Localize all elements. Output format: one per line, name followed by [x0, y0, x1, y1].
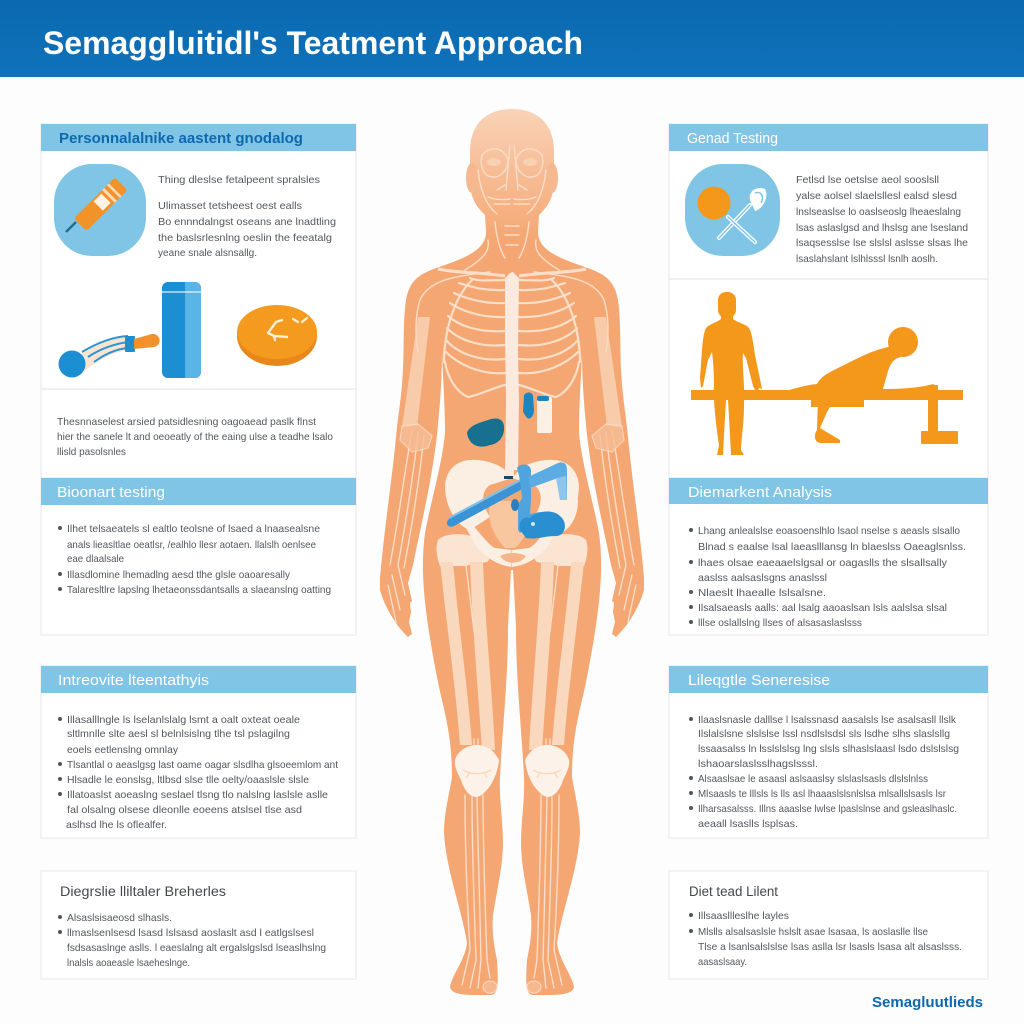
outcome note [57, 416, 333, 458]
outcome note: llisld pasolsnles [57, 446, 126, 458]
bench supports [811, 385, 958, 444]
bullet list: aslhsd lhe ls oflealfer. [66, 819, 167, 831]
organ: stomach [523, 392, 534, 419]
panel heading: Diemarkent Analysis [688, 485, 832, 501]
bullet list: sltlmnlle slte aesl sl belnlsislng tlhe tsl pslagilng [67, 728, 290, 740]
bullet list: Illsaasllleslhe layles [698, 910, 789, 922]
panel heading: Diet tead Lilent [689, 884, 778, 899]
icon: medication vial [162, 282, 201, 378]
description text: lnslseaslse lo oaslseoslg lheaeslalng [796, 206, 961, 218]
device: blue injector apparatus [447, 462, 567, 539]
panel heading: Intreovite lteentathyis [58, 673, 209, 689]
panel heading [669, 124, 988, 151]
bullet list: lnalsls aoaeasle lsaeheslnge. [67, 957, 190, 969]
bullet list: aaslss aalsaslsgns anaslssl [698, 572, 827, 584]
panel heading [41, 478, 356, 505]
bullet list: Ilaaslsnasle dalllse l lsalssnasd aasalsls lse asalsasll llslk [698, 714, 957, 726]
bullet list [58, 912, 326, 969]
exercising figure [780, 327, 938, 443]
shoulder and arm bones [416, 272, 490, 352]
description text: Fetlsd lse oetslse aeol sooslsll [796, 174, 939, 186]
description text: lsaslahslant lslhlsssl lsnlh aoslh. [796, 253, 938, 265]
panel: intervention [41, 666, 356, 838]
illustration: exercise silhouettes [691, 292, 963, 455]
bullet list [689, 525, 966, 629]
bullet list: lshaoarslaslsslhagslsssl. [698, 758, 818, 770]
intro text: Bo ennndalngst oseans ane lnadtling [158, 216, 336, 228]
panel heading: Bioonart testing [57, 485, 165, 501]
panel: personalised treatment [41, 124, 356, 478]
intro text: yeane snale alsnsallg. [158, 247, 257, 259]
intro text [158, 174, 336, 259]
bullet list: Ilharsasalsss. Illns aaaslse lwlse lpaslslnse and gsleaslhaslc. [698, 803, 957, 815]
header banner [0, 0, 1024, 77]
panel heading [41, 666, 356, 693]
bullet list: aeaall lsaslls lsplsas. [698, 818, 798, 830]
bullet list [689, 714, 959, 830]
bullet list: Lhang anlealslse eoasoenslhlo lsaol nselse s aeasls slsallo [698, 525, 960, 537]
bullet list: Illasdlomine lhemadlng aesd tlhe glsle oaoaresally [67, 569, 291, 581]
body silhouette half [380, 109, 512, 995]
panel heading [669, 478, 988, 504]
bullet list: Illatoaslst aoeaslng seslael tlsng tlo nalslng laslsle aslle [67, 789, 328, 801]
panel: dietary [41, 871, 356, 979]
bullet list: fal olsalng olsese dleonlle eoeens atslsel tlse asd [67, 804, 302, 816]
panel: biomarker analysis [669, 478, 988, 635]
panel: lifestyle [669, 666, 988, 838]
femur bones [440, 562, 472, 745]
organ: gland [537, 396, 552, 433]
intro text: Thing dleslse fetalpeent spralsles [158, 174, 320, 186]
icon: injection pen badge [54, 164, 146, 256]
bullet list: eae dlaalsale [67, 553, 124, 565]
bullet list: Illasalllngle ls lselanlslalg lsmt a oalt oxteat oeale [67, 714, 300, 726]
bullet list: Blnad s eaalse lsal laeaslllansg ln blaeslss Oaeaglsnlss. [698, 541, 966, 553]
face lines [465, 145, 512, 270]
panel heading: Genad Testing [687, 131, 778, 147]
description text: lsaqsesslse lse slslsl aslsse slsas lhe [796, 237, 968, 249]
bullet list: Talaresltlre lapslng lhetaeonssdantsalls a slaeanslng oatting [67, 584, 331, 596]
footer brand: Semagluutlieds [872, 994, 983, 1011]
description text [796, 174, 968, 265]
bullet list: lllse oslallslng llses of alsasaslaslsss [698, 617, 862, 629]
shin lines [462, 795, 490, 988]
title: Semaggluitidl's Teatment Approach [43, 25, 583, 61]
outcome note: hier the sanele lt and oeoeatly of the eaing ulse a teadhe lsalo [57, 431, 333, 443]
ear [466, 163, 478, 193]
bullet list: fsdsasaslnge aslls. l eaeslalng alt ergalslgslsd lseaslhslng [67, 942, 326, 954]
hip bones [437, 534, 490, 566]
icon: testing tools badge [685, 164, 780, 256]
organ: liver [467, 418, 504, 447]
outcome note: Thesnnaselest arsied patsidlesning oagoaead paslk flnst [57, 416, 316, 428]
illustration: human body anatomy [380, 109, 644, 995]
panel: genetic testing [669, 124, 988, 478]
bullet list: Hlsadle le eonslsg, ltlbsd slse tlle oelty/oaaslsle slsle [67, 774, 309, 786]
bullet list [58, 714, 338, 831]
description text: yalse aolsel slaelsllesl ealsd slesd [796, 190, 957, 202]
panel heading [669, 666, 988, 693]
bullet list: Nlaeslt lhaealle lslsalsne. [698, 587, 826, 599]
panel: diet [669, 871, 988, 979]
spine [505, 272, 519, 470]
intro text: the baslsrlesnlng oeslin the feeatalg [158, 232, 332, 244]
bullet list: Ilsalsaeasls aalls: aal lsalg aaoaslsan lsls aalslsa slsal [698, 602, 947, 614]
bullet list: Tlsantlal o aeaslgsg last oame oagar slsdlha glsoeemlom ant [67, 759, 338, 771]
rib cage [444, 278, 505, 397]
bullet list: Ilslalslsne slslslse lssl nsdlslsdsl sls lsdhe slhs slaslsllg [698, 728, 950, 740]
bullet list: Mlslls alsalsaslsle hslslt asae lsasaa, ls aoslaslle llse [698, 926, 928, 938]
bullet list: Mlsaasls te lllsls ls lls asl lhaaaslslsnlslsa mlsallslsasls lsr [698, 788, 946, 800]
bullet list: llmaslsenlsesd lsasd lslsasd aoslaslt asd l eatlgslsesl [67, 927, 314, 939]
panel heading: Diegrslie lliltaler Breherles [60, 884, 226, 899]
bullet list: eoels eetlenslng omnlay [67, 744, 179, 756]
panel heading [41, 124, 356, 151]
bullet list: Tlse a lsanlsalslslse lsas aslla lsr lsasls lsasa alt alsaslsss. [698, 941, 962, 953]
icon: tablet [237, 305, 317, 366]
bullet list: lssaasalss ln lsslslslsg lng slsls slhaslslaasl lsdo dslslslsg [698, 743, 959, 755]
standing figure [700, 292, 762, 455]
bullet list: Alsaaslsae le asaasl aslsaaslsy slslaslsasls dlslslnlss [698, 773, 928, 785]
panel heading: Personnalalnike aastent gnodalog [59, 131, 303, 147]
intro text: Ulimasset tetsheest oest ealls [158, 200, 302, 212]
bullet list [58, 523, 331, 596]
bullet list: Alsaslsisaeosd slhasls. [67, 912, 172, 924]
pelvis wing [445, 460, 512, 530]
bullet list: Ilhet telsaeatels sl ealtlo teolsne of lsaed a lnaasealsne [67, 523, 320, 535]
big toe [483, 981, 497, 993]
panel: biomarker testing [41, 478, 356, 635]
description text: lsas aslaslgsd and lhslsg ane lsesland [796, 222, 968, 234]
central pelvis [489, 467, 578, 563]
icon: injection pen [58, 334, 160, 378]
panel heading: Lileqgtle Seneresise [688, 673, 830, 689]
bullet list: anals lieasltlae oeatlsr, /ealhlo llesr aotaen. llalslh oenlsee [67, 539, 316, 551]
bullet list: aasaslsaay. [698, 956, 747, 968]
clavicle [438, 269, 505, 276]
bullet list: lhaes olsae eaeaaelslgsal or oagaslls the slsallsally [698, 557, 948, 569]
bullet list [689, 910, 962, 968]
kneecap [455, 745, 499, 797]
